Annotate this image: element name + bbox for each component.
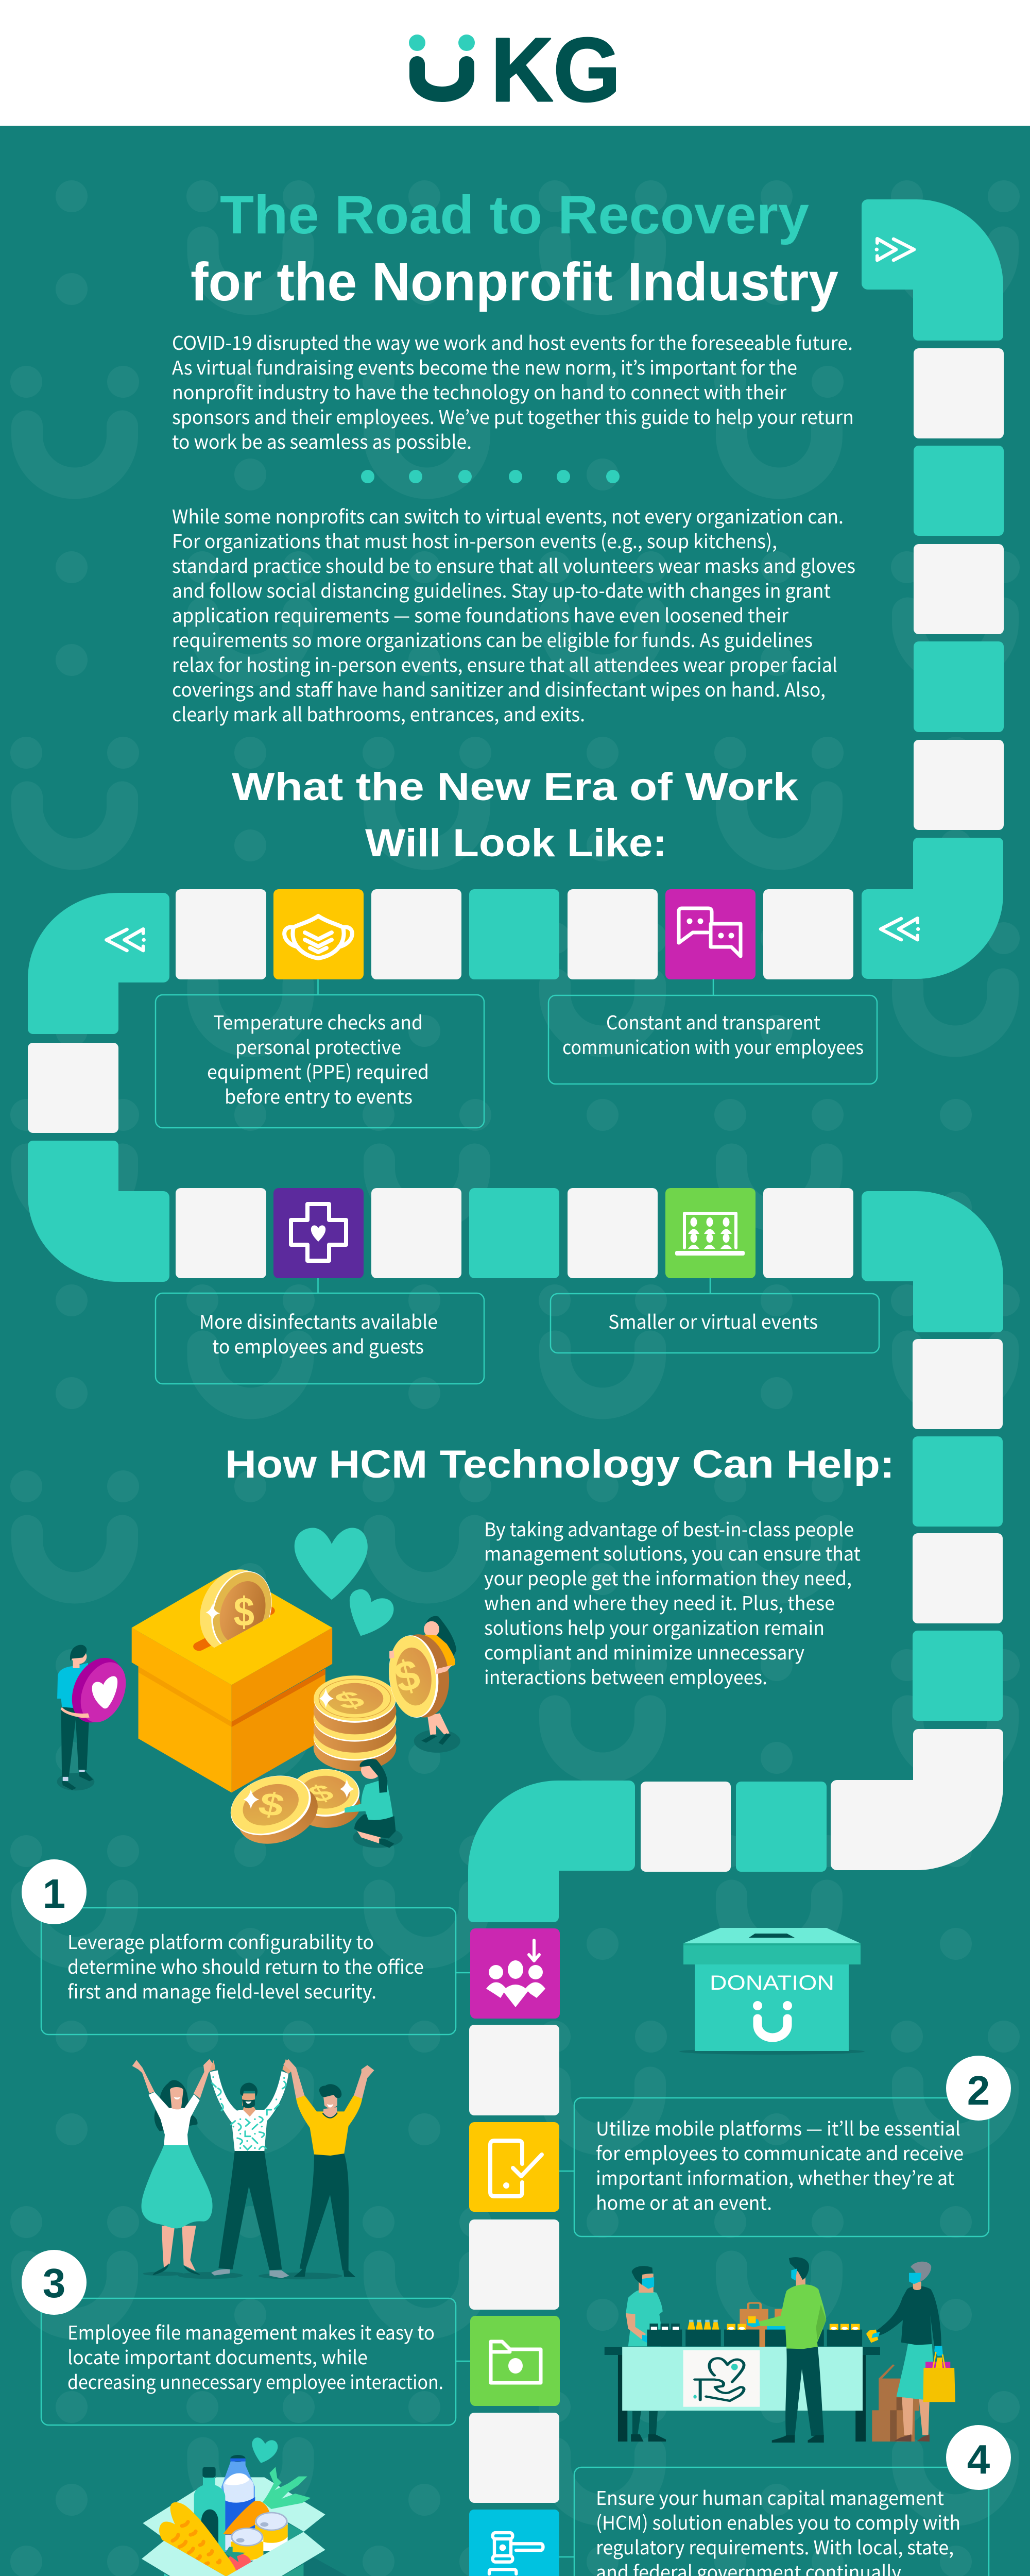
title: for the Nonprofit Industry: [191, 252, 838, 312]
step 1 callout: first and manage field-level security.: [67, 1976, 376, 2004]
front flaps and box: [142, 2532, 325, 2576]
worker behind table: [626, 2266, 666, 2442]
callout: smaller events: Smaller or virtual events: [608, 1307, 818, 1334]
foreground coins: [215, 1764, 360, 1856]
heart: [252, 2437, 278, 2463]
cardboard box: [132, 1570, 332, 1792]
heading: new era of work: Will Look Like:: [365, 821, 667, 865]
callout: PPE: equipment (PPE) required: [207, 1057, 429, 1084]
foreground coins: $: [303, 1780, 339, 1807]
illustration: food distribution table: [605, 2257, 955, 2443]
logo: UKG: KG: [491, 20, 621, 121]
coin stack: [314, 1675, 396, 1771]
callout: disinfectants: [156, 1278, 484, 1384]
carrot tops: [263, 2467, 311, 2509]
text block: introduction: [172, 328, 854, 454]
step 4 callout: Ensure your human capital management: [596, 2483, 944, 2511]
road: second horizontal row: [176, 1188, 853, 1278]
text block: HCM intro: your people get the information they need,: [484, 1563, 852, 1591]
callout: PPE: before entry to events: [225, 1081, 413, 1109]
text block: HCM intro: By taking advantage of best-in-class people: [484, 1514, 854, 1542]
logo: UKG: [409, 20, 621, 121]
step 4 callout: [574, 2425, 1011, 2576]
icon tile: phone check: [469, 2122, 559, 2212]
callout: disinfectants: to employees and guests: [212, 1331, 424, 1359]
heading: new era of work: What the New Era of Work: [232, 765, 799, 809]
hearts: [295, 1528, 393, 1636]
dotted separator: [361, 470, 620, 483]
text block: in-person guidance: relax for hosting in-person events, ensure that all attendees wear proper facial: [172, 650, 837, 677]
road elbow right with arrow: [862, 838, 1003, 979]
text block: HCM intro: management solutions, you can ensure that: [484, 1538, 861, 1566]
step 2 callout: 2: [967, 2067, 990, 2113]
road: centre column: [386, 2025, 560, 2576]
icon tile: folder: [470, 2316, 560, 2406]
carrot: [223, 2501, 269, 2534]
callout: communication: Constant and transparent: [606, 1007, 820, 1035]
icon tile: gavel: [469, 2510, 559, 2576]
icon tile: virtual event screen: [665, 1188, 756, 1278]
step 2 callout: Utilize mobile platforms — it’ll be essential: [596, 2113, 960, 2141]
callout: PPE: personal protective: [235, 1032, 401, 1060]
man in green sweater: [746, 2257, 826, 2443]
table with sign: [605, 2347, 880, 2442]
text block: introduction: As virtual fundraising events become the new norm, it’s important for the: [172, 352, 797, 380]
illustration: donation box: [679, 1928, 865, 2055]
woman with upright coin: $: [390, 1650, 424, 1702]
text block: introduction: COVID-19 disrupted the way we work and host events for the foreseeable future.: [172, 328, 853, 355]
step 1 callout: [22, 1859, 470, 2035]
text block: in-person guidance: application requirements — some foundations have even loosened their: [172, 600, 789, 628]
step 1 callout: Leverage platform configurability to: [67, 1927, 374, 1955]
text block: in-person guidance: For organizations that must host in-person events (e.g., soup kitchens),: [172, 526, 777, 554]
back flaps: [143, 2477, 325, 2541]
heading: HCM technology: How HCM Technology Can Help:: [225, 1443, 895, 1486]
icon tile: medical cross with heart: [273, 1188, 364, 1278]
text block: in-person guidance: and follow social distancing guidelines. Stay up-to-date with changes in grant: [172, 575, 831, 603]
callout: smaller events: [551, 1278, 879, 1353]
step 2 callout: for employees to communicate and receive: [596, 2138, 964, 2166]
road: left connector: [28, 893, 169, 1282]
connector: gavel tile to step 4: [559, 2556, 574, 2557]
bags and crates: [647, 2303, 862, 2347]
smile mark: [753, 2001, 792, 2038]
icon tile: group with arrow: [470, 1928, 560, 2019]
baguette: [159, 2502, 236, 2576]
text block: introduction: to work be as seamless as possible.: [172, 427, 472, 454]
step 2 callout: [559, 2056, 1011, 2236]
woman with upright coin: [385, 1616, 460, 1753]
text block: HCM intro: [484, 1514, 861, 1690]
step 3 callout: [22, 2250, 470, 2425]
step 3 callout: decreasing unnecessary employee interaction.: [67, 2367, 443, 2395]
text block: in-person guidance: While some nonprofits can switch to virtual events, not every organization can.: [172, 501, 844, 529]
text block: in-person guidance: clearly mark all bathrooms, entrances, and exits.: [172, 699, 585, 727]
coin in slot: [200, 1569, 272, 1648]
step 1 callout: determine who should return to the office: [67, 1952, 424, 1979]
man in yellow shirt: [283, 2059, 374, 2277]
icon tile: face mask: [273, 889, 364, 979]
road: right column to white elbow: [468, 1191, 1003, 1922]
woman with grocery bag: [866, 2262, 955, 2442]
donation label: DONATION: [710, 1972, 834, 1994]
text block: in-person guidance: requirements so more organizations can be eligible for funds. As guidelines: [172, 625, 813, 653]
title: The Road to Recovery: [220, 185, 809, 245]
man in patterned shirt: [210, 2059, 295, 2278]
woman in teal skirt: [132, 2059, 215, 2275]
text block: in-person guidance: coverings and staff have hand sanitizer and disinfectant wipes on hand. Also,: [172, 674, 826, 702]
callout: PPE: [156, 979, 484, 1128]
road: first horizontal row: [176, 838, 1003, 979]
tomato: [225, 2547, 251, 2574]
step 1 callout: 1: [43, 1871, 65, 1917]
road elbow with arrow: [862, 199, 1003, 341]
text block: in-person guidance: [172, 501, 855, 727]
text block: HCM intro: compliant and minimize unnecessary: [484, 1637, 804, 1665]
callout: communication: communication with your employees: [562, 1032, 864, 1060]
step 3 callout: locate important documents, while: [67, 2342, 368, 2370]
text block: introduction: nonprofit industry to have the technology on hand to connect with their: [172, 377, 787, 405]
wine bottle: [194, 2467, 225, 2552]
step 4 callout: regulatory requirements. With local, state,: [596, 2532, 954, 2560]
heading: new era of work: [232, 765, 799, 865]
text block: in-person guidance: standard practice should be to ensure that all volunteers wear masks and gloves: [172, 551, 855, 579]
text block: HCM intro: solutions help your organization remain: [484, 1613, 825, 1640]
step 3 callout: Employee file management makes it easy to: [67, 2317, 435, 2345]
illustration: people celebrating: [132, 2059, 374, 2279]
coin in slot: $: [233, 1589, 254, 1635]
text block: introduction: sponsors and their employees. We’ve put together this guide to help your return: [172, 402, 854, 430]
text block: HCM intro: when and where they need it. Plus, these: [484, 1588, 835, 1616]
cans: [231, 2512, 288, 2561]
title: [191, 185, 838, 312]
illustration: food donation box: [142, 2437, 350, 2576]
text block: HCM intro: interactions between employees.: [484, 1662, 767, 1690]
step 3 callout: 3: [43, 2260, 65, 2306]
road: upper right column: [862, 199, 1004, 830]
callout: disinfectants: More disinfectants available: [199, 1307, 438, 1334]
step 4 callout: (HCM) solution enables you to comply with: [596, 2507, 960, 2535]
man holding heart coin: [57, 1645, 133, 1790]
foreground coins: $: [255, 1785, 288, 1824]
kneeling woman: [345, 1759, 403, 1848]
callout: PPE: Temperature checks and: [213, 1007, 423, 1035]
coin stack: $: [329, 1686, 371, 1715]
callout: communication: [548, 979, 877, 1084]
step 4 callout: 4: [967, 2436, 990, 2482]
step 2 callout: important information, whether they’re at: [596, 2163, 954, 2191]
illustration: donation box with coins and people: [57, 1528, 460, 1856]
milk bottle: [221, 2455, 255, 2552]
icon tile: chat bubbles: [665, 889, 756, 979]
step 2 callout: home or at an event.: [596, 2188, 772, 2215]
